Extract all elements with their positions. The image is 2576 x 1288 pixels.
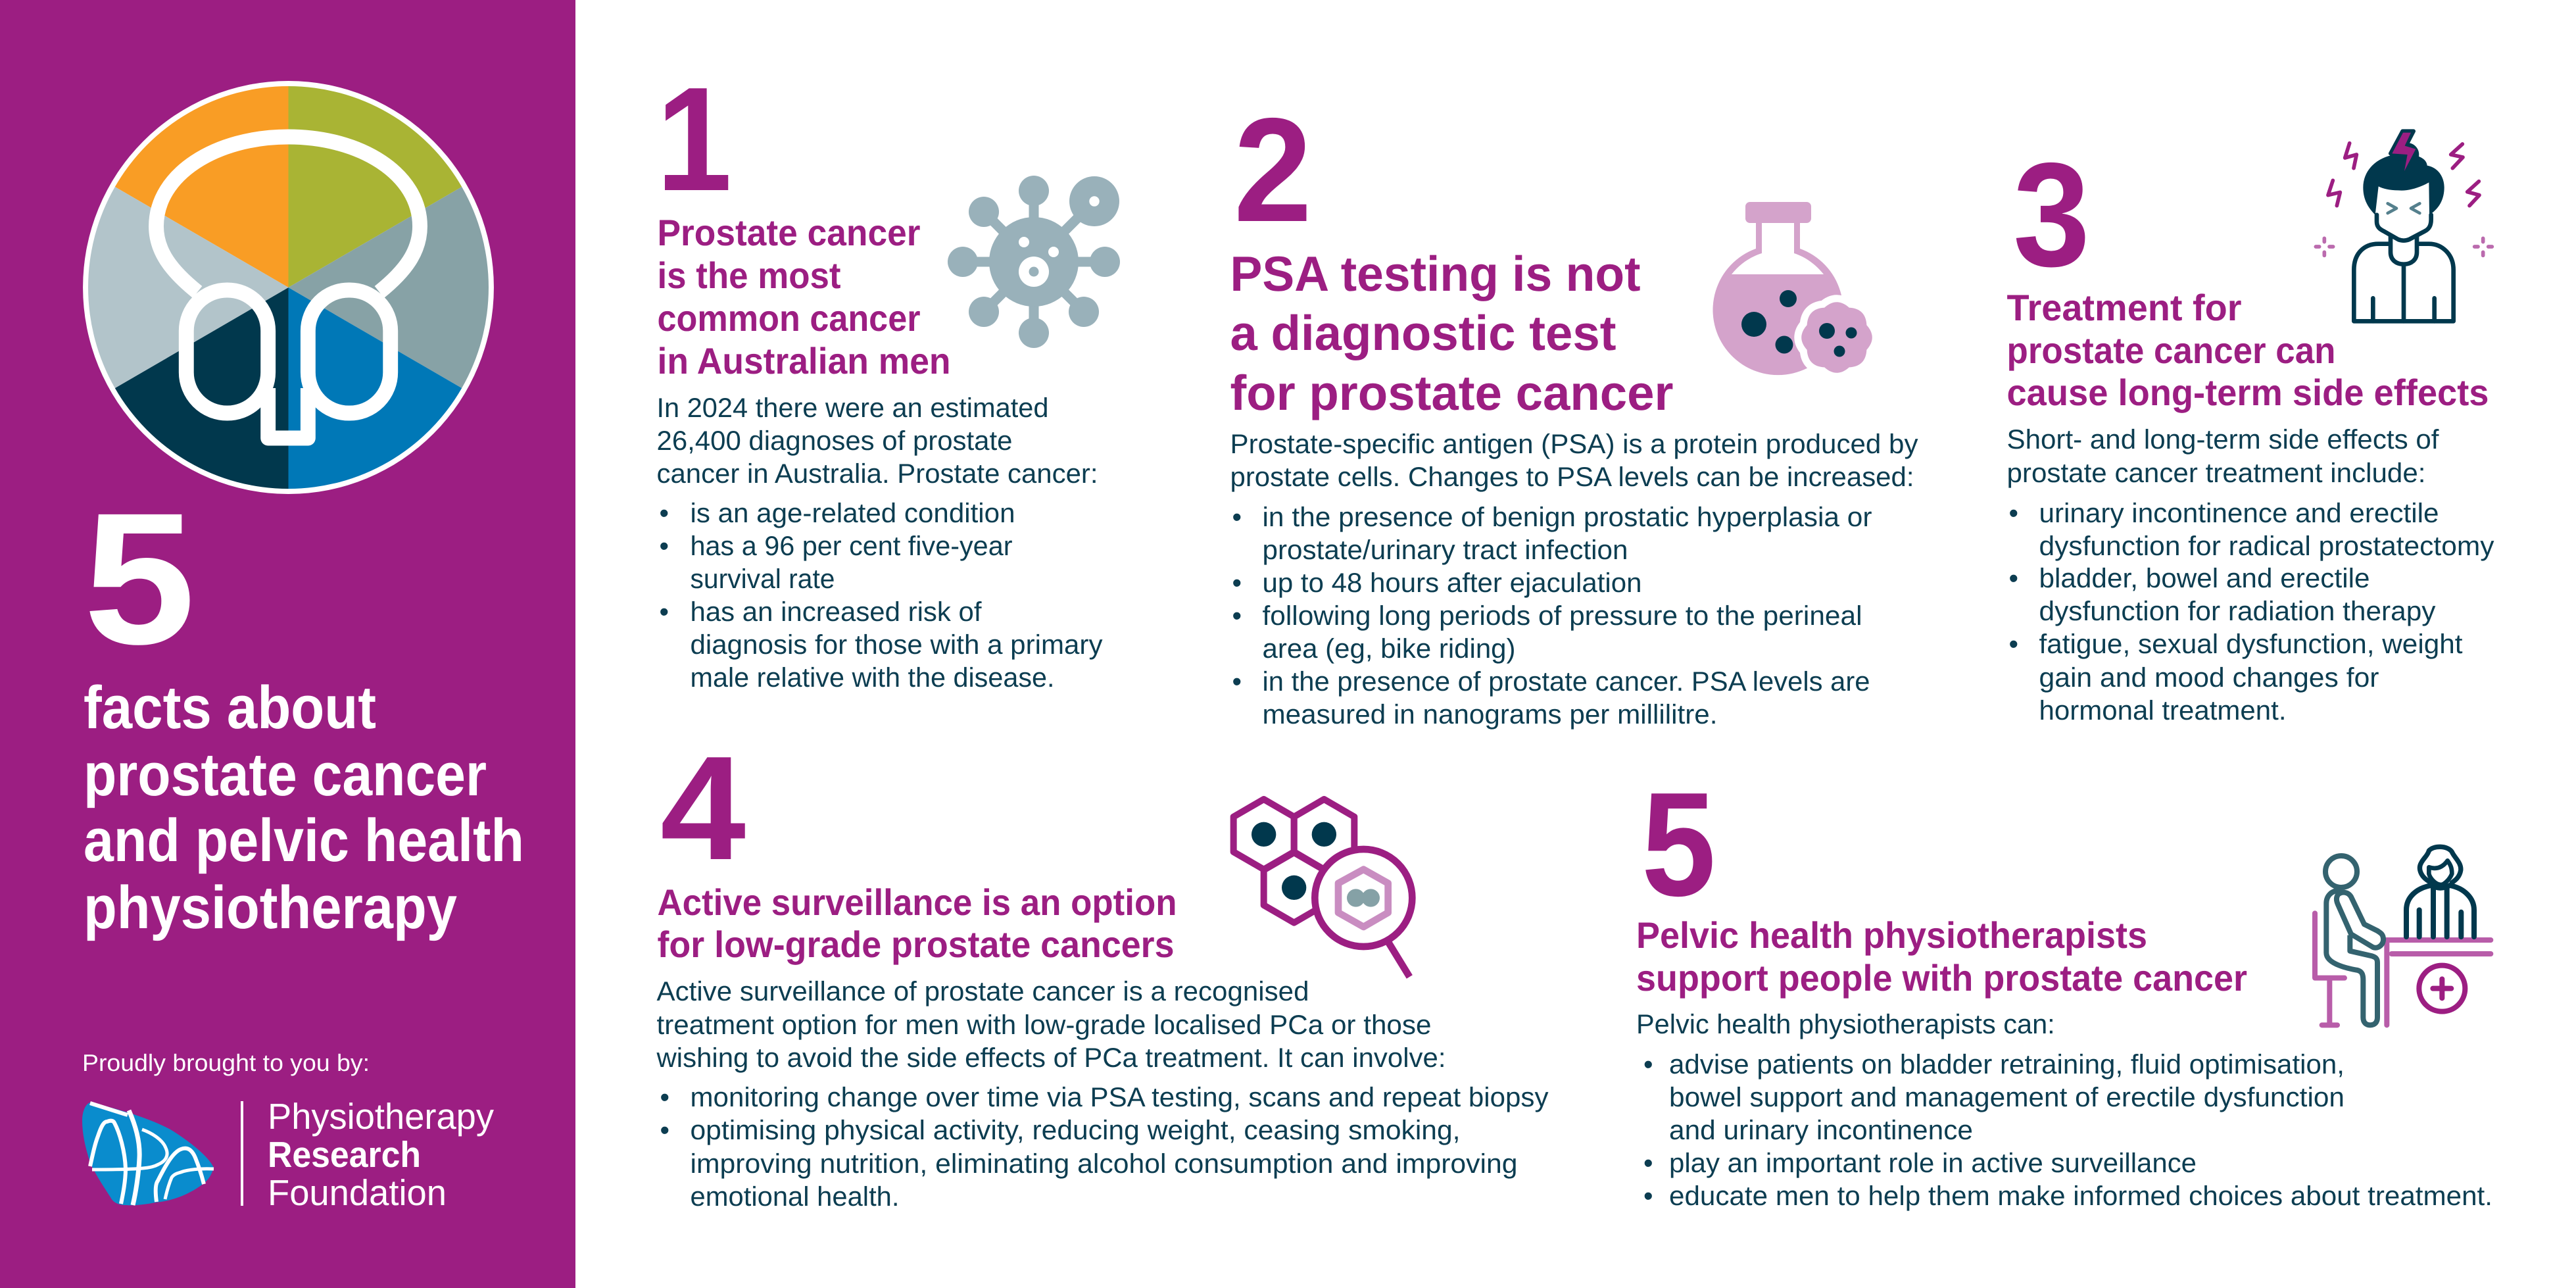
icon: APA logo — [82, 1102, 214, 1205]
body text: fact 2: measured in nanograms per millilitre. — [1263, 699, 1718, 730]
body text: fact 1: • — [659, 530, 669, 561]
body text: fact 5: • — [1643, 1180, 1653, 1211]
foundation wordmark — [268, 1096, 494, 1213]
body text: fact 2: • — [1232, 666, 1242, 697]
body text: fact 1: cancer in Australia. Prostate cancer: — [656, 458, 1098, 489]
body text: fact 3: urinary incontinence and erectile — [2039, 497, 2439, 528]
heading: fact 3: prostate cancer can — [2007, 330, 2336, 371]
heading: fact 2: for prostate cancer — [1230, 365, 1673, 420]
body text: fact 2: in the presence of prostate cancer. PSA levels are — [1263, 666, 1870, 697]
body text: fact 1: has a 96 per cent five-year — [691, 530, 1013, 561]
heading: fact 2 — [1230, 246, 1673, 420]
body text: fact 5: advise patients on bladder retraining, fluid optimisation, — [1669, 1049, 2345, 1079]
icon: consultation — [2315, 847, 2491, 1025]
number 2: 2 — [1234, 87, 1312, 253]
body text: fact 2: prostate/urinary tract infection — [1263, 534, 1628, 565]
body text: fact 3: Short- and long-term side effects of — [2007, 424, 2439, 455]
foundation wordmark: Physiotherapy — [268, 1096, 494, 1137]
heading: fact 3: Treatment for — [2007, 287, 2241, 328]
body text: fact 2: up to 48 hours after ejaculation — [1263, 567, 1641, 598]
heading: fact 5: Pelvic health physiotherapists — [1636, 914, 2147, 956]
panel: fact 1 — [656, 56, 1120, 693]
body text: fact 4: improving nutrition, eliminating alcohol consumption and improving — [691, 1148, 1518, 1179]
heading: fact 4: Active surveillance is an option — [658, 881, 1177, 923]
big number 5: 5 — [84, 474, 195, 683]
panel: fact 5 — [1636, 761, 2492, 1211]
body text: fact 1: male relative with the disease. — [691, 662, 1055, 693]
body text: fact 3: prostate cancer treatment include: — [2007, 457, 2425, 488]
heading: fact 5 — [1636, 914, 2247, 999]
heading: fact 1: common cancer — [658, 297, 921, 339]
title: facts about — [84, 674, 376, 741]
body text: fact 5: and urinary incontinence — [1669, 1114, 1973, 1145]
heading: fact 1: is the most — [658, 255, 840, 296]
body text: fact 2: area (eg, bike riding) — [1263, 633, 1515, 664]
heading: fact 1: in Australian men — [658, 340, 951, 382]
body text: fact 3: gain and mood changes for — [2039, 662, 2379, 693]
heading: fact 3 — [2007, 287, 2489, 413]
icon: cells under magnifier — [1234, 799, 1412, 977]
body text: fact 2: • — [1232, 501, 1242, 532]
title: physiotherapy — [84, 874, 457, 941]
number 4: 4 — [660, 725, 746, 891]
heading: fact 1 — [658, 212, 951, 382]
body text: fact 3: • — [2008, 497, 2018, 528]
body text: fact 4 — [656, 976, 1549, 1212]
heading: fact 3: cause long-term side effects — [2007, 372, 2489, 413]
icon: flask — [1713, 202, 1871, 375]
sponsor line: Proudly brought to you by: — [82, 1049, 370, 1076]
title: prostate cancer — [84, 741, 487, 808]
body text: fact 2: Prostate-specific antigen (PSA) is a protein produced by — [1230, 428, 1918, 459]
panel: left sidebar — [0, 0, 575, 1288]
body text: fact 1: has an increased risk of — [691, 596, 982, 627]
body text: fact 1: In 2024 there were an estimated — [656, 392, 1048, 423]
body text: fact 1: 26,400 diagnoses of prostate — [656, 425, 1013, 456]
body text: fact 5: Pelvic health physiotherapists can: — [1636, 1008, 2055, 1039]
body text: fact 1 — [656, 392, 1103, 693]
body text: fact 2: following long periods of pressure to the perineal — [1263, 600, 1862, 631]
body text: fact 5: • — [1643, 1147, 1653, 1178]
title — [84, 674, 524, 941]
body text: fact 3: hormonal treatment. — [2039, 695, 2286, 726]
body text: fact 4: • — [660, 1081, 669, 1112]
number 1: 1 — [656, 56, 732, 222]
body text: fact 5: play an important role in active surveillance — [1669, 1147, 2197, 1178]
body text: fact 1: • — [659, 497, 669, 528]
body text: fact 3 — [2007, 424, 2494, 726]
body text: fact 4: wishing to avoid the side effects of PCa treatment. It can involve: — [656, 1042, 1446, 1073]
body text: fact 1: survival rate — [691, 563, 835, 594]
icon: person with headache — [2316, 131, 2492, 321]
body text: fact 3: fatigue, sexual dysfunction, weight — [2039, 628, 2463, 659]
body text: fact 5: bowel support and management of erectile dysfunction — [1669, 1081, 2345, 1112]
body text: fact 5 — [1636, 1008, 2492, 1211]
body text: fact 3: bladder, bowel and erectile — [2039, 562, 2370, 593]
body text: fact 4: optimising physical activity, reducing weight, ceasing smoking, — [691, 1114, 1460, 1145]
number 3: 3 — [2013, 132, 2090, 297]
body text: fact 5: • — [1643, 1049, 1653, 1079]
body text: fact 3: dysfunction for radical prostatectomy — [2039, 530, 2494, 561]
body text: fact 4: • — [660, 1114, 669, 1145]
body text: fact 1: is an age-related condition — [691, 497, 1015, 528]
body text: fact 4: emotional health. — [691, 1181, 900, 1212]
body text: fact 2: in the presence of benign prostatic hyperplasia or — [1263, 501, 1872, 532]
body text: fact 5: educate men to help them make informed choices about treatment. — [1669, 1180, 2492, 1211]
panel: fact 3 — [2007, 131, 2494, 726]
icon: prostate logo — [83, 81, 494, 494]
heading: fact 2: a diagnostic test — [1230, 305, 1616, 360]
body text: fact 3: • — [2008, 562, 2018, 593]
body text: fact 2 — [1230, 428, 1918, 730]
body text: fact 2: • — [1232, 600, 1242, 631]
heading: fact 4 — [658, 881, 1177, 965]
icon: virus — [948, 176, 1120, 348]
foundation wordmark: Research — [268, 1134, 421, 1175]
body text: fact 1: diagnosis for those with a primary — [691, 629, 1103, 660]
panel: fact 2 — [1230, 87, 1918, 730]
heading: fact 2: PSA testing is not — [1230, 246, 1641, 301]
panel: fact 4 — [656, 725, 1549, 1212]
heading: fact 4: for low-grade prostate cancers — [658, 924, 1175, 965]
body text: fact 4: monitoring change over time via PSA testing, scans and repeat biopsy — [691, 1081, 1549, 1112]
heading: fact 1: Prostate cancer — [658, 212, 921, 253]
body text: fact 1: • — [659, 596, 669, 627]
logo divider — [241, 1101, 243, 1206]
title: and pelvic health — [84, 807, 524, 874]
body text: fact 4: Active surveillance of prostate cancer is a recognised — [656, 976, 1309, 1006]
foundation wordmark: Foundation — [268, 1172, 447, 1213]
body text: fact 3: dysfunction for radiation therapy — [2039, 595, 2436, 626]
body text: fact 3: • — [2008, 628, 2018, 659]
body text: fact 4: treatment option for men with low-grade localised PCa or those — [656, 1009, 1431, 1040]
body text: fact 2: prostate cells. Changes to PSA levels can be increased: — [1230, 461, 1914, 492]
body text: fact 2: • — [1232, 567, 1242, 598]
heading: fact 5: support people with prostate cancer — [1636, 957, 2247, 999]
number 5: 5 — [1641, 761, 1716, 927]
